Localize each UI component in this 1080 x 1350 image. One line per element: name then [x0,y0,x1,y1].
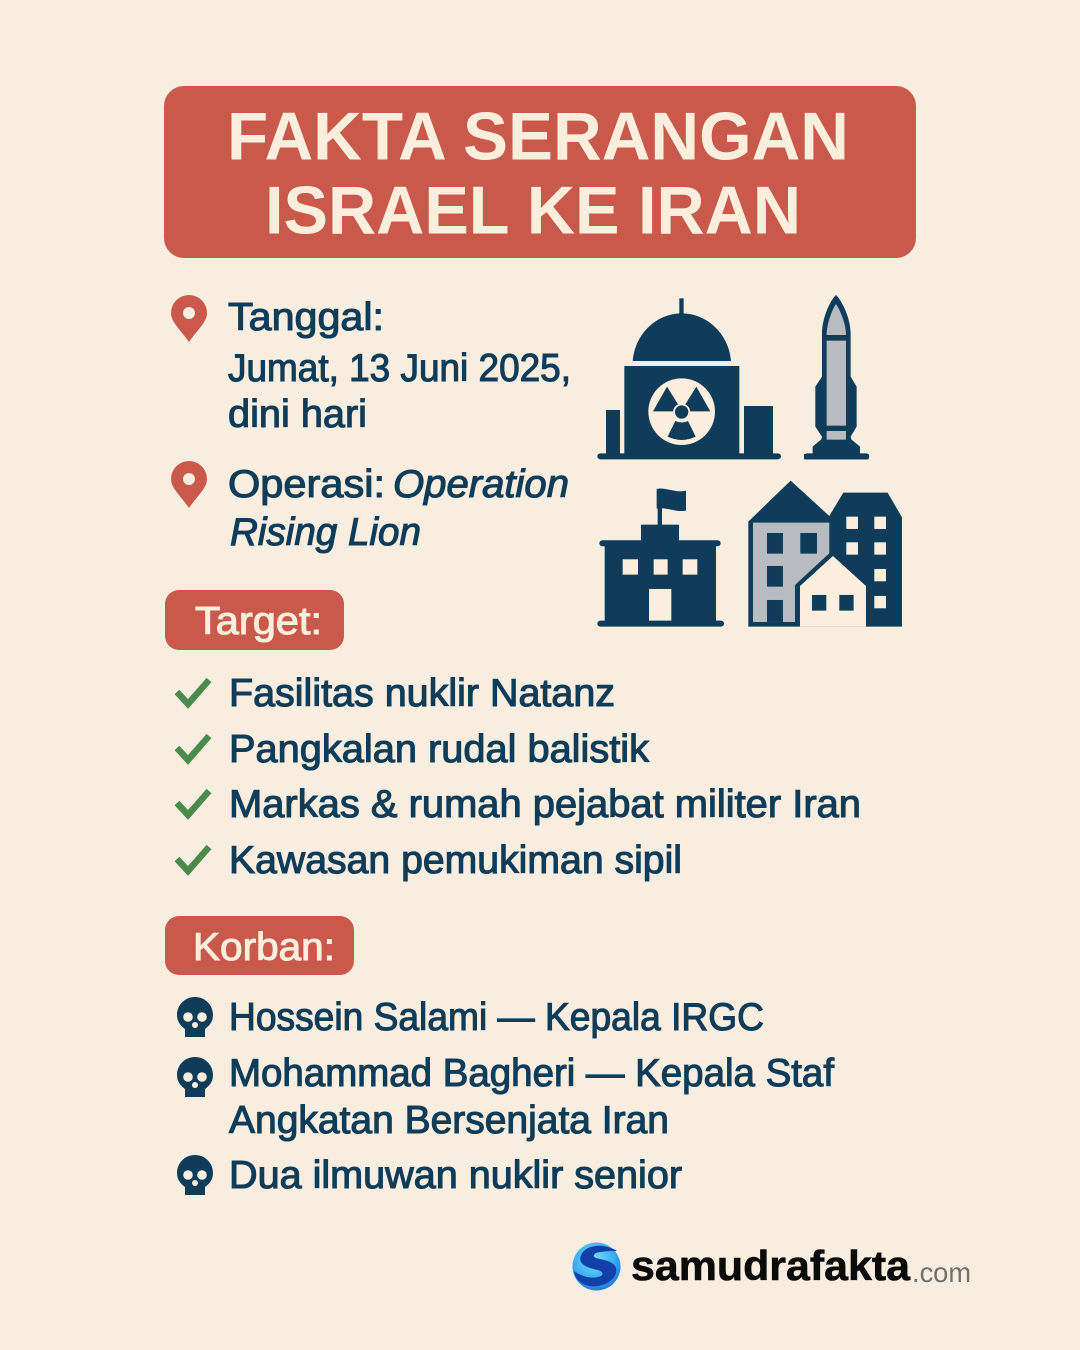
date text [228,296,571,436]
footer logo: samudrafakta [631,1242,911,1289]
icon: ballistic missile [804,295,869,459]
icon: residential buildings [748,481,902,627]
operation text: Operasi: [228,463,385,506]
footer logo [572,1242,971,1290]
heading: Target: Target: [195,600,322,643]
icon: military headquarters [597,488,724,627]
icon: samudrafakta logo [572,1242,620,1290]
title banner: ISRAEL KE IRAN [265,172,801,248]
check item: headquarters: Markas & rumah pejabat militer Iran [229,783,861,826]
icon: nuclear facility [597,298,781,459]
check item: civilian area: Kawasan pemukiman sipil [229,839,682,882]
operation text: Rising Lion [230,511,421,554]
victim: nuclear scientists: Dua ilmuwan nuklir senior [229,1154,682,1197]
date text: Tanggal: [228,296,384,339]
heading: Target [165,590,344,650]
victim: Hossein Salami: Hossein Salami — Kepala IRGC [229,996,764,1039]
operation text [228,463,569,554]
check item: missile base: Pangkalan rudal balistik [229,728,650,771]
operation text: Operation [393,463,569,506]
check item: Natanz: Fasilitas nuklir Natanz [229,672,615,715]
heading: Korban [165,916,354,975]
title banner [164,86,916,258]
title banner: FAKTA SERANGAN [227,98,849,174]
victim: Mohammad Bagheri: Mohammad Bagheri — Kepala Staf [229,1052,834,1095]
date block [171,295,571,436]
icon: location pin [171,295,207,342]
date text: dini hari [228,393,367,436]
victim: Mohammad Bagheri: Angkatan Bersenjata Iran [229,1099,669,1142]
icon: location pin [171,461,207,508]
target list [177,672,861,882]
heading: Korban: Korban: [193,926,335,969]
victims list [177,996,834,1197]
footer logo: .com [912,1257,971,1288]
victim: Mohammad Bagheri [177,1052,834,1142]
date text: Jumat, 13 Juni 2025, [228,347,571,390]
operation block [171,461,569,554]
